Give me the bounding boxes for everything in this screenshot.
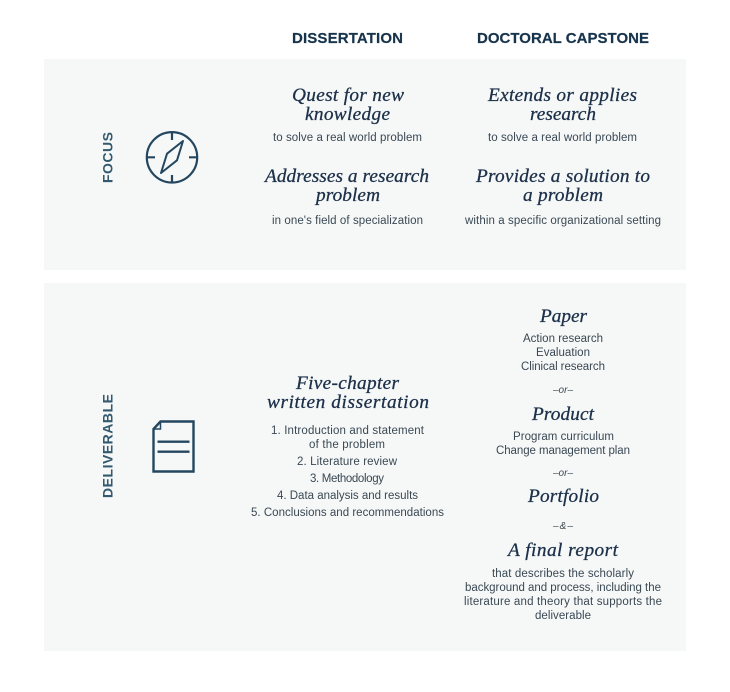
- capstone deliverable text: background and process, including the: [465, 582, 661, 594]
- dissertation focus text: [263, 85, 429, 227]
- dissertation focus text: to solve a real world problem: [273, 132, 422, 144]
- capstone deliverable text: deliverable: [535, 610, 591, 622]
- capstone deliverable text: Product: [531, 404, 595, 425]
- dissertation deliverable text: 3. Methodology: [310, 473, 384, 485]
- capstone focus text: research: [530, 104, 596, 125]
- dissertation deliverable text: 2. Literature review: [297, 456, 398, 468]
- capstone deliverable text: Clinical research: [521, 361, 605, 373]
- dissertation focus text: Addresses a research: [263, 166, 429, 187]
- capstone deliverable text: A final report: [506, 540, 619, 561]
- capstone focus text: Extends or applies: [487, 85, 637, 106]
- panel: focus: [44, 59, 686, 270]
- capstone focus text: a problem: [523, 185, 603, 206]
- capstone focus text: [464, 85, 661, 227]
- label: focus: FOCUS: [100, 132, 116, 183]
- capstone deliverable text: Change management plan: [496, 445, 630, 457]
- dissertation deliverable text: 5. Conclusions and recommendations: [251, 507, 444, 519]
- capstone deliverable text: literature and theory that supports the: [464, 596, 662, 608]
- label: deliverable: DELIVERABLE: [100, 394, 116, 498]
- capstone deliverable text: Evaluation: [536, 347, 590, 359]
- dissertation focus text: Quest for new: [292, 85, 404, 106]
- dissertation deliverable text: 1. Introduction and statement: [271, 425, 425, 437]
- heading: dissertation column: DISSERTATION: [292, 30, 403, 47]
- icon: compass: [147, 132, 197, 183]
- panel: deliverable: [44, 283, 686, 651]
- capstone deliverable text: Paper: [539, 306, 587, 327]
- capstone deliverable text: that describes the scholarly: [492, 568, 634, 580]
- capstone deliverable text: –or–: [552, 385, 573, 396]
- capstone deliverable text: –&–: [552, 521, 573, 532]
- icon: document: [154, 422, 194, 472]
- capstone focus text: within a specific organizational setting: [464, 215, 661, 227]
- dissertation focus text: knowledge: [305, 104, 390, 125]
- dissertation deliverable text: 4. Data analysis and results: [277, 490, 418, 502]
- capstone deliverable text: –or–: [552, 468, 573, 479]
- dissertation deliverable text: written dissertation: [267, 392, 429, 413]
- dissertation deliverable text: of the problem: [309, 439, 385, 451]
- dissertation deliverable text: [251, 373, 444, 519]
- capstone focus text: to solve a real world problem: [488, 132, 637, 144]
- capstone deliverable text: [464, 306, 662, 622]
- dissertation focus text: in one's field of specialization: [272, 215, 423, 227]
- dissertation deliverable text: Five-chapter: [295, 373, 399, 394]
- capstone deliverable text: Action research: [523, 333, 603, 345]
- dissertation focus text: problem: [314, 185, 380, 206]
- capstone deliverable text: Program curriculum: [513, 431, 614, 443]
- heading: doctoral capstone column: DOCTORAL CAPSTONE: [477, 30, 649, 47]
- capstone focus text: Provides a solution to: [475, 166, 650, 187]
- capstone deliverable text: Portfolio: [527, 486, 599, 507]
